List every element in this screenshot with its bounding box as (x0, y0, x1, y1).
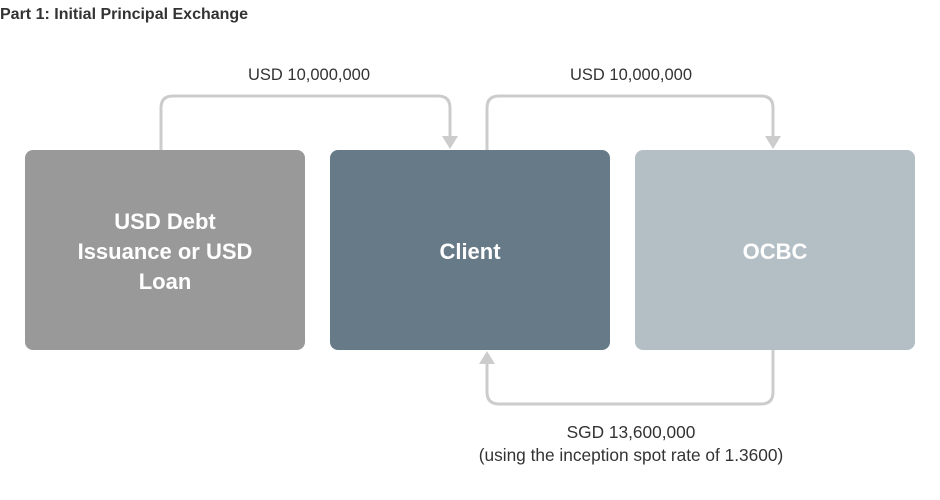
title: Part 1: Initial Principal Exchange (0, 6, 248, 23)
box: client: Client (439, 239, 501, 264)
box: USD debt (25, 150, 305, 350)
label: SGD amount (479, 422, 783, 465)
arrow: client to OCBC (487, 96, 781, 150)
box: OCBC: OCBC (743, 239, 807, 264)
box: USD debt: USD Debt (114, 209, 216, 234)
label: SGD amount: SGD 13,600,000 (567, 422, 695, 442)
label: top left amount: USD 10,000,000 (248, 66, 370, 84)
box: OCBC (635, 150, 915, 350)
box: USD debt: Loan (139, 269, 191, 294)
label: SGD amount: (using the inception spot rate of 1.3600) (479, 445, 783, 465)
box: client (330, 150, 610, 350)
box: USD debt: Issuance or USD (78, 239, 252, 264)
arrow: OCBC to client (479, 350, 773, 404)
label: top right amount: USD 10,000,000 (570, 66, 692, 84)
arrow: debt to client (161, 96, 458, 150)
